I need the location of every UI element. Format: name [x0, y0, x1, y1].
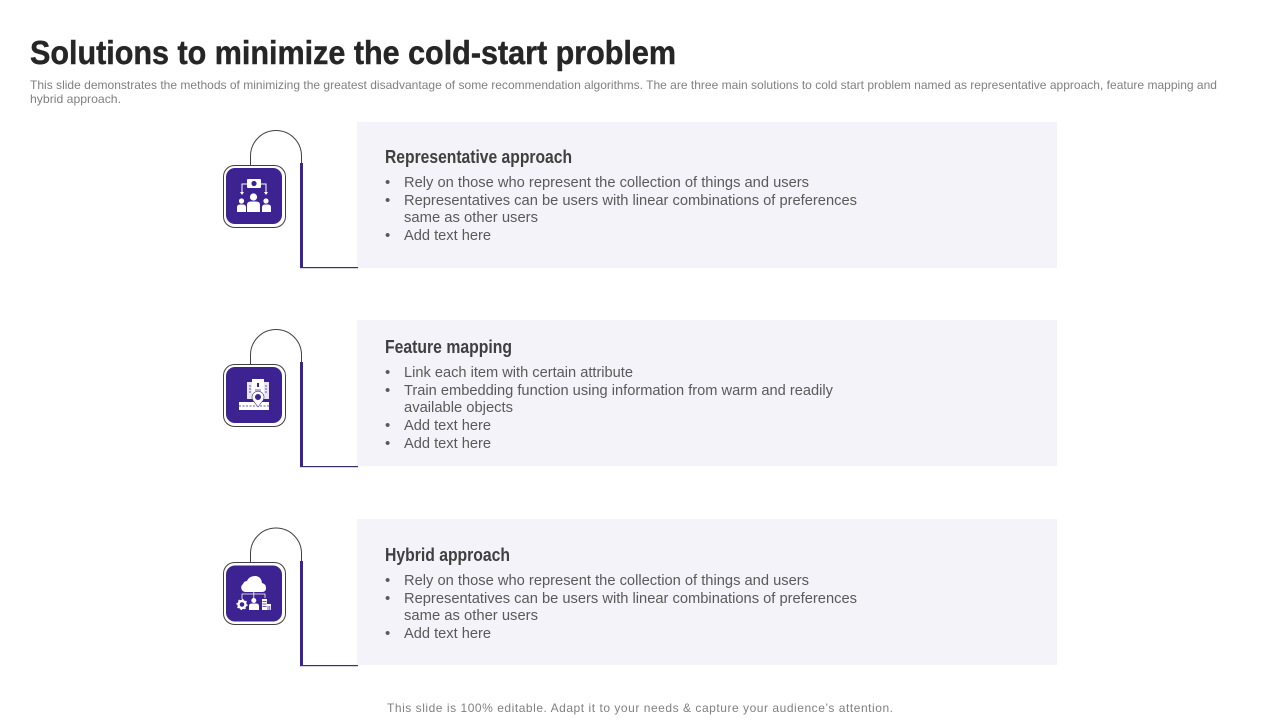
- bullet list: feature mapping: Link each item with certain attribute: [404, 364, 633, 381]
- bullet list: feature mapping: •: [385, 382, 390, 399]
- bullet list: representative approach: [385, 174, 857, 244]
- panel: hybrid approach: [357, 519, 1057, 665]
- connector: hybrid approach: [250, 528, 358, 666]
- bullet list: feature mapping: Add text here: [404, 417, 491, 434]
- connector: feature mapping: [250, 330, 358, 467]
- bullet list: feature mapping: available objects: [404, 399, 513, 416]
- bullet list: hybrid approach: Representatives can be users with linear combinations of preferences: [404, 590, 857, 607]
- subtitle text: This slide demonstrates the methods of minimizing the greatest disadvantage of some recommendation algorithms. The are three main solutions to cold start problem named as representative approach, feature mapping and: [30, 78, 1217, 92]
- bullet list: representative approach: •: [385, 227, 390, 244]
- subtitle text: hybrid approach.: [30, 92, 121, 106]
- bullet list: hybrid approach: same as other users: [404, 607, 538, 624]
- bullet list: hybrid approach: [385, 572, 857, 642]
- bullet list: feature mapping: •: [385, 417, 390, 434]
- panel: feature mapping: [357, 320, 1057, 466]
- icon: building with location pin: [224, 364, 286, 426]
- subtitle text: [30, 78, 1217, 106]
- bullet list: hybrid approach: •: [385, 590, 390, 607]
- bullet list: feature mapping: Add text here: [404, 435, 491, 452]
- bullet list: representative approach: •: [385, 174, 390, 191]
- panel: representative approach: [357, 122, 1057, 268]
- heading: representative approach: Representative approach: [385, 147, 572, 167]
- bullet list: hybrid approach: •: [385, 572, 390, 589]
- title: Solutions to minimize the cold-start problem: [30, 35, 676, 72]
- bullet list: representative approach: Add text here: [404, 227, 491, 244]
- bullet list: representative approach: Representatives can be users with linear combinations of preferences: [404, 192, 857, 209]
- bullet list: representative approach: •: [385, 192, 390, 209]
- bullet list: hybrid approach: •: [385, 625, 390, 642]
- icon: people with a shared star board: [224, 166, 286, 228]
- heading: hybrid approach: Hybrid approach: [385, 545, 510, 565]
- footer note: This slide is 100% editable. Adapt it to your needs & capture your audience’s attention.: [387, 701, 893, 715]
- bullet list: hybrid approach: Add text here: [404, 625, 491, 642]
- bullet list: hybrid approach: Rely on those who represent the collection of things and users: [404, 572, 809, 589]
- icon: cloud network: [224, 562, 286, 624]
- heading: feature mapping: Feature mapping: [385, 337, 512, 357]
- bullet list: representative approach: same as other users: [404, 209, 538, 226]
- connector: representative approach: [250, 130, 358, 268]
- bullet list: feature mapping: •: [385, 435, 390, 452]
- bullet list: feature mapping: [385, 364, 833, 452]
- bullet list: feature mapping: •: [385, 364, 390, 381]
- bullet list: representative approach: Rely on those who represent the collection of things and users: [404, 174, 809, 191]
- bullet list: feature mapping: Train embedding function using information from warm and readily: [404, 382, 833, 399]
